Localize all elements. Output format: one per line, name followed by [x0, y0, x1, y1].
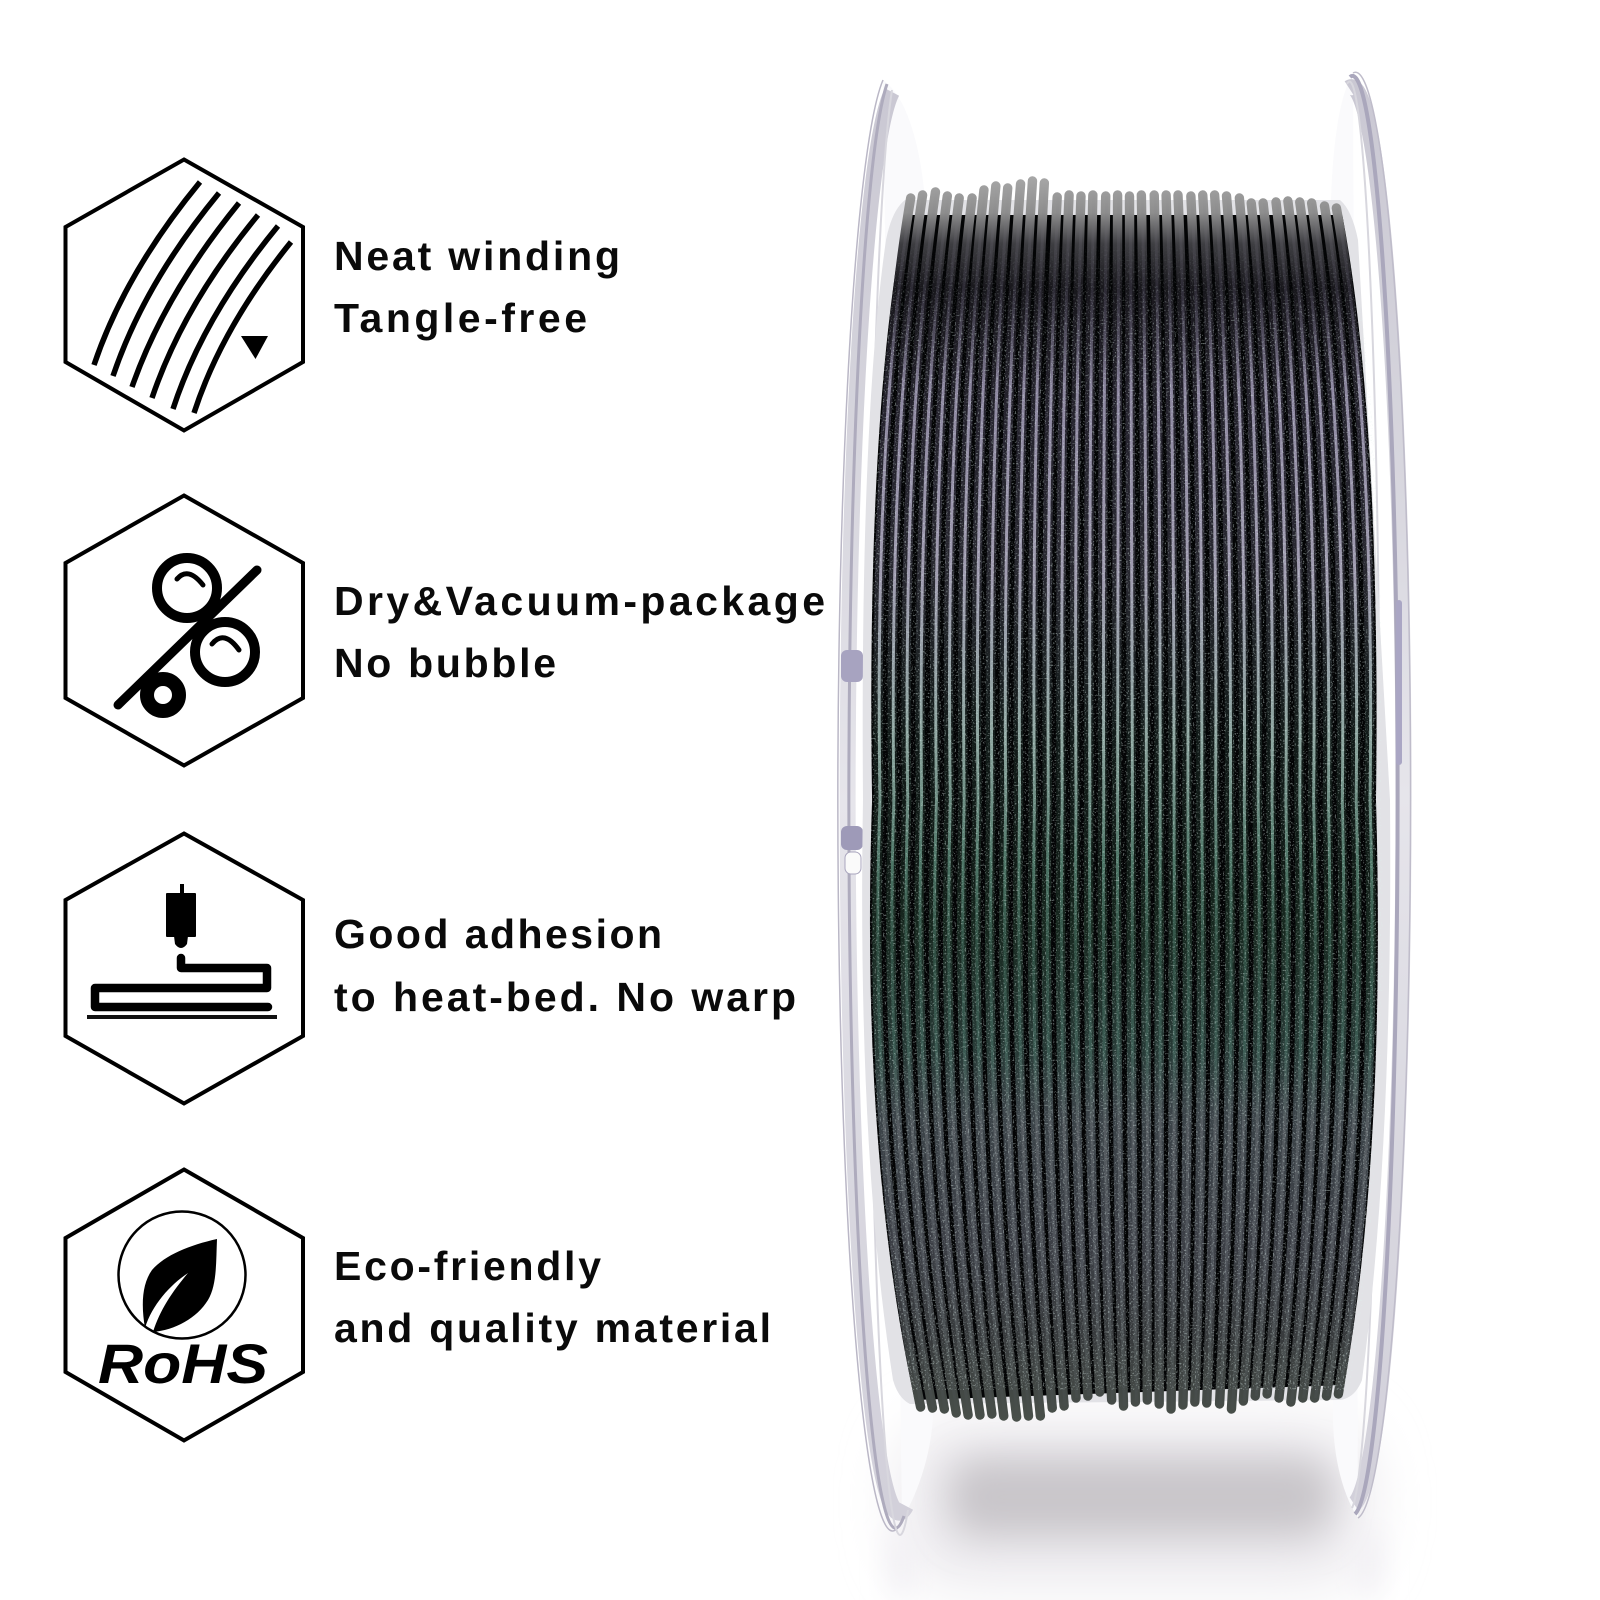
icon: nozzle on heat bed hexagon	[66, 834, 303, 1104]
feature 4: eco-friendly	[66, 1170, 771, 1440]
feature 1: neat winding	[66, 160, 620, 430]
filament winding	[870, 181, 1378, 1417]
text: good adhesion to heat-bed, no warp: to heat-bed. No warp	[334, 974, 796, 1020]
icon: RoHS leaf hexagon: RoHS	[98, 1332, 268, 1395]
right flange	[1331, 72, 1411, 1518]
text: eco-friendly and quality material	[334, 1243, 771, 1351]
left flange	[838, 80, 933, 1535]
floor shadow under spool	[890, 1420, 1379, 1595]
spool product image	[838, 72, 1411, 1595]
feature 2: dry and vacuum package	[66, 496, 825, 766]
text: good adhesion to heat-bed, no warp: Good adhesion	[334, 911, 662, 957]
feature 3: good adhesion	[66, 834, 796, 1104]
text: dry and vacuum package, no bubble: No bubble	[334, 640, 556, 686]
text: neat winding, tangle-free: Tangle-free	[334, 295, 587, 341]
text: neat winding, tangle-free: Neat winding	[334, 233, 620, 279]
text: dry and vacuum package, no bubble	[334, 578, 825, 686]
text: eco-friendly and quality material: and quality material	[334, 1305, 771, 1351]
text: dry and vacuum package, no bubble: Dry&Vacuum-package	[334, 578, 825, 624]
filament sparkle	[860, 240, 1390, 1390]
icon: RoHS leaf hexagon	[66, 1170, 303, 1440]
text: neat winding, tangle-free	[334, 233, 620, 341]
text: eco-friendly and quality material: Eco-friendly	[334, 1243, 601, 1289]
icon: wound filament hexagon	[66, 160, 303, 430]
hub behind filament	[862, 200, 1390, 1404]
text: good adhesion to heat-bed, no warp	[334, 911, 796, 1020]
icon: no bubble percent hexagon	[66, 496, 303, 766]
